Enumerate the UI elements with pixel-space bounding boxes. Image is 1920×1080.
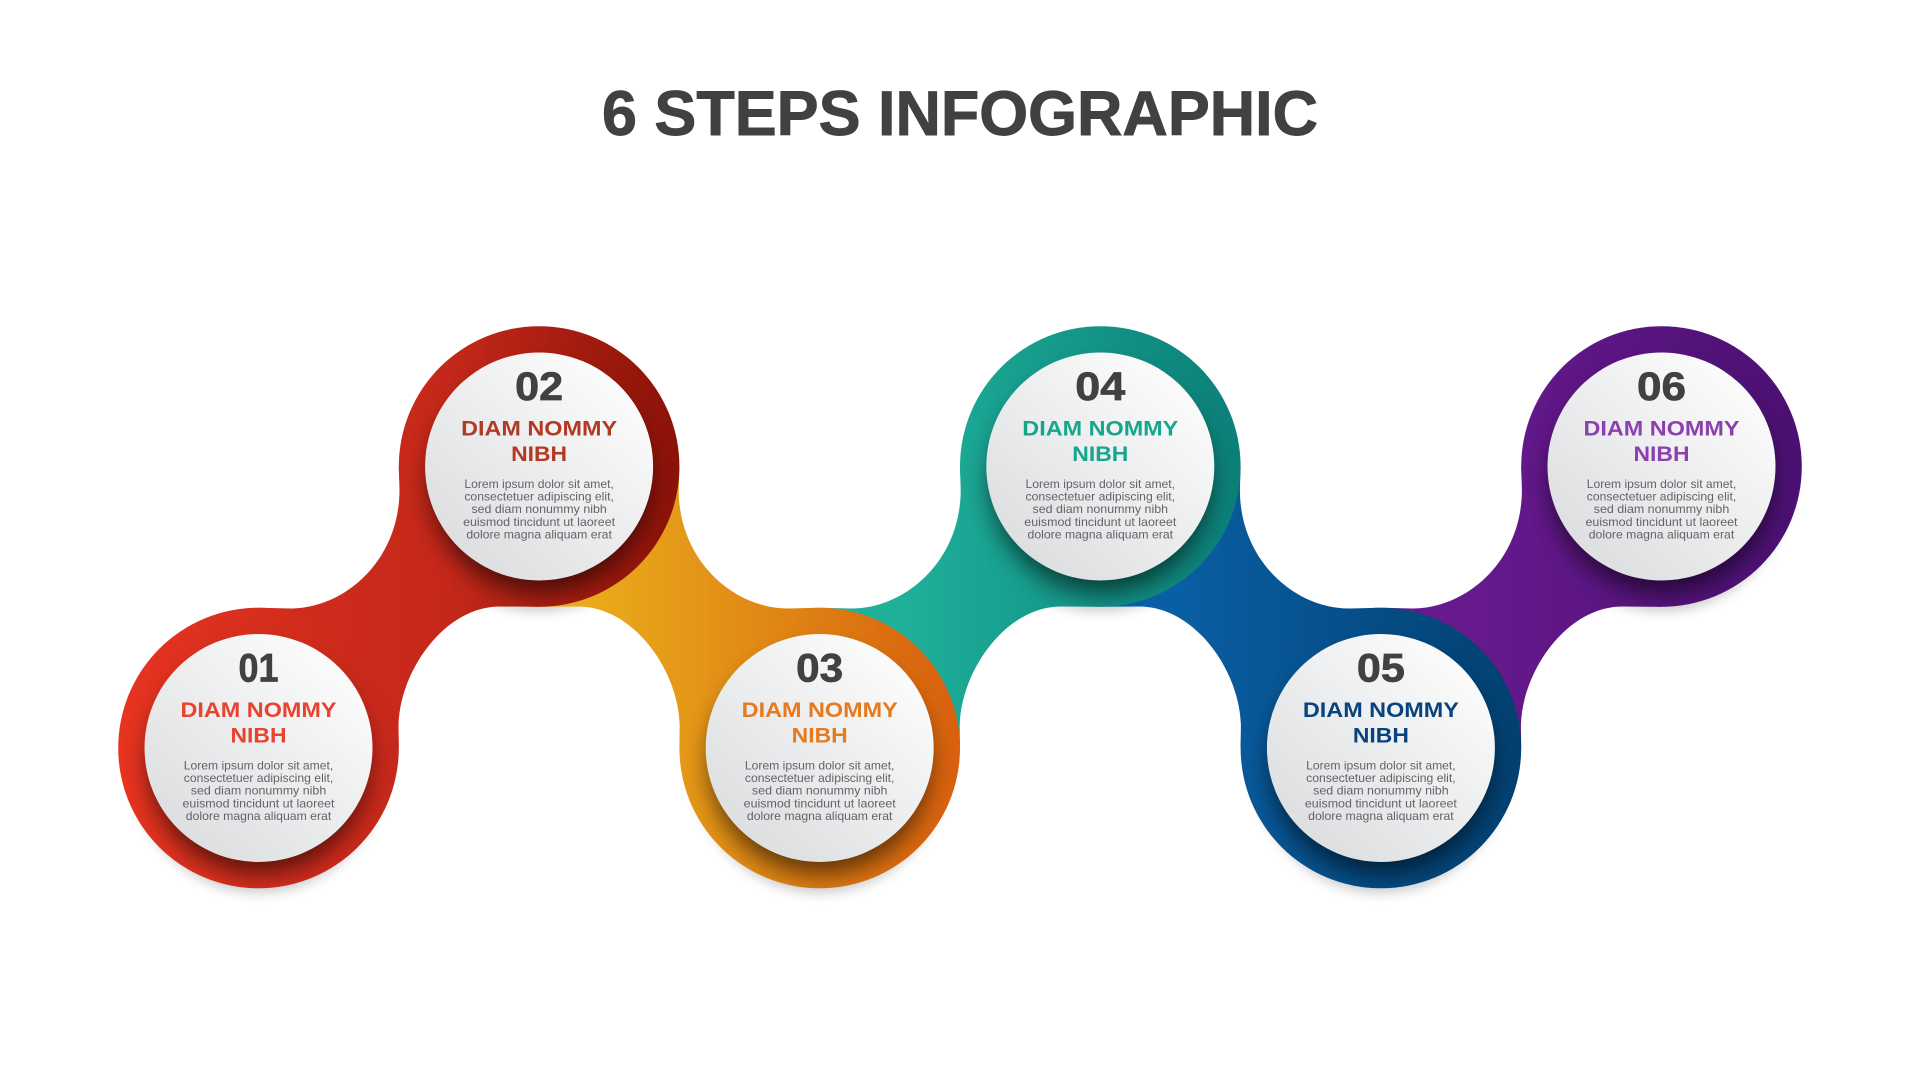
infographic canvas (118, 90, 1802, 898)
body text 04: Lorem ipsum dolor sit amet, (1026, 477, 1175, 491)
ring 01 (118, 608, 399, 888)
disc 01 (144, 634, 372, 862)
soft drop shadows below the rings (134, 362, 1786, 893)
body text 02: Lorem ipsum dolor sit amet, (464, 477, 614, 491)
heading 01: NIBH (230, 724, 286, 748)
panel: step 03 (539, 466, 960, 888)
inner shadow 02 (429, 372, 649, 592)
panel: step 06 (1381, 326, 1802, 748)
heading 05: DIAM NOMMY (1303, 698, 1459, 722)
panel: step 01 (118, 608, 399, 888)
body text 03: consectetuer adipiscing elit, (745, 771, 894, 785)
heading 04: DIAM NOMMY (1022, 416, 1178, 440)
title: 6 STEPS INFOGRAPHIC (602, 79, 1318, 149)
number 04: 04 (1075, 365, 1126, 409)
body text 06: dolore magna aliquam erat (1589, 528, 1735, 542)
body text 05: sed diam nonummy nibh (1313, 784, 1449, 798)
connector 02 to 03 (539, 466, 820, 748)
number 03: 03 (796, 646, 843, 690)
heading 03: NIBH (792, 724, 848, 748)
heading 06: NIBH (1634, 442, 1690, 466)
body text 03: sed diam nonummy nibh (752, 784, 887, 798)
number 02: 02 (515, 365, 563, 409)
heading 06: DIAM NOMMY (1584, 416, 1740, 440)
body text 04: sed diam nonummy nibh (1033, 502, 1168, 516)
heading 02: DIAM NOMMY (461, 416, 617, 440)
connector 04 to 05 (1100, 466, 1381, 748)
body text 05: consectetuer adipiscing elit, (1306, 771, 1456, 785)
connector 01 to 02 (258, 466, 539, 748)
body text 03: euismod tincidunt ut laoreet (744, 796, 896, 810)
body text 03: dolore magna aliquam erat (747, 809, 893, 823)
body text 02: sed diam nonummy nibh (471, 502, 607, 516)
ring 06 (1521, 326, 1802, 607)
body text 01: dolore magna aliquam erat (186, 809, 332, 823)
body text 04: consectetuer adipiscing elit, (1026, 490, 1175, 504)
body text 05: Lorem ipsum dolor sit amet, (1306, 758, 1456, 772)
body text 02: consectetuer adipiscing elit, (464, 490, 614, 504)
heading 04: NIBH (1072, 442, 1128, 466)
body text 01: consectetuer adipiscing elit, (184, 771, 333, 785)
number 05: 05 (1357, 646, 1405, 690)
body text 01: euismod tincidunt ut laoreet (182, 796, 335, 810)
heading 03: DIAM NOMMY (742, 698, 898, 722)
ring 05 (1241, 608, 1521, 888)
body text 05: dolore magna aliquam erat (1308, 809, 1454, 823)
body text 04: dolore magna aliquam erat (1028, 528, 1174, 542)
body text 04: euismod tincidunt ut laoreet (1024, 515, 1177, 529)
body text 02: euismod tincidunt ut laoreet (463, 515, 616, 529)
connector 03 to 04 (820, 466, 1100, 748)
disc 03 (706, 634, 934, 862)
body text 06: consectetuer adipiscing elit, (1587, 490, 1736, 504)
connector 05 to 06 (1381, 466, 1662, 748)
ring 04 (960, 326, 1241, 607)
number 06: 06 (1637, 365, 1686, 409)
panel: step 02 (258, 326, 679, 748)
inner shadow 05 (1271, 654, 1491, 874)
ring 02 (399, 326, 679, 607)
ring 03 (679, 608, 960, 888)
disc 02 (425, 352, 653, 580)
heading 05: NIBH (1353, 724, 1409, 748)
heading 01: DIAM NOMMY (180, 698, 336, 722)
number 01: 01 (238, 646, 278, 690)
body text 05: euismod tincidunt ut laoreet (1305, 796, 1458, 810)
body text 01: sed diam nonummy nibh (191, 784, 326, 798)
panel: step 04 (820, 326, 1241, 748)
inner shadow 06 (1552, 372, 1772, 592)
inner shadow 04 (990, 372, 1210, 592)
panel: step 05 (1100, 466, 1521, 888)
body text 01: Lorem ipsum dolor sit amet, (184, 758, 333, 772)
disc 05 (1267, 634, 1495, 862)
body text 02: dolore magna aliquam erat (466, 528, 613, 542)
inner shadow 01 (148, 654, 368, 874)
heading 02: NIBH (511, 442, 567, 466)
body text 03: Lorem ipsum dolor sit amet, (745, 758, 894, 772)
body text 06: sed diam nonummy nibh (1594, 502, 1729, 516)
inner shadow 03 (710, 654, 930, 874)
body text 06: euismod tincidunt ut laoreet (1586, 515, 1738, 529)
disc 04 (986, 352, 1214, 580)
disc 06 (1548, 352, 1776, 580)
body text 06: Lorem ipsum dolor sit amet, (1587, 477, 1736, 491)
